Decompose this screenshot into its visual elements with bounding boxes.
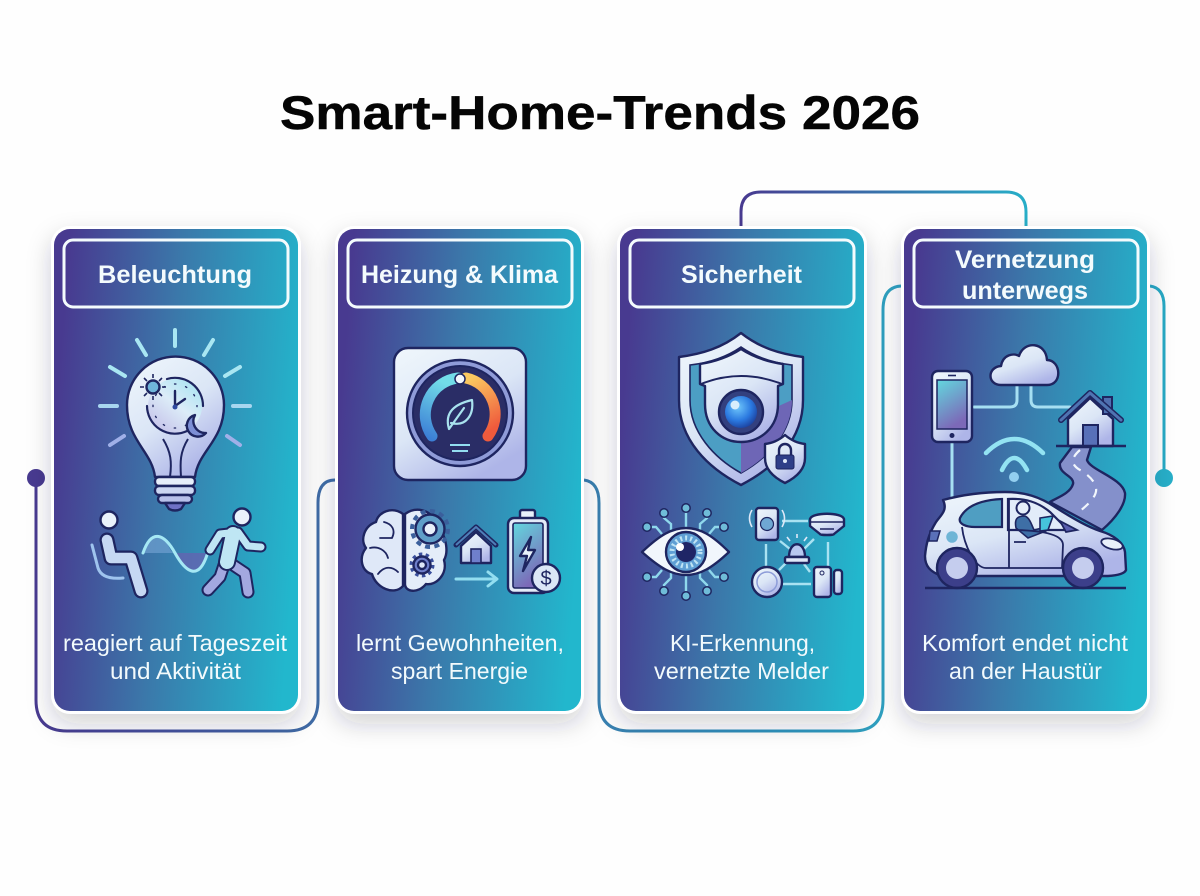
text: Vernetzung description — [922, 630, 1129, 684]
heading: Beleuchtung — [64, 240, 288, 307]
heading: Heizung & Klima: Heizung & Klima — [361, 261, 559, 289]
heading: Vernetzung unterwegs: Vernetzung — [955, 246, 1095, 274]
icon: brain, house and battery — [362, 510, 560, 593]
panel: Vernetzung unterwegs — [901, 226, 1150, 714]
text: Sicherheit description: vernetzte Melder — [654, 658, 829, 684]
panel: Beleuchtung — [51, 226, 301, 714]
text: Sicherheit description — [654, 630, 829, 684]
connector: Sicherheit to Vernetzung top — [741, 192, 1026, 226]
icon: shield with camera and lock — [679, 333, 805, 485]
panel: Heizung & Klima — [335, 226, 584, 714]
icon: AI eye — [642, 504, 729, 600]
icon: brain, house and battery: $ — [540, 568, 552, 590]
text: Beleuchtung description — [63, 630, 288, 684]
title: Smart-Home-Trends 2026 — [280, 86, 920, 139]
text: Heizung description: lernt Gewohnheiten, — [356, 630, 564, 656]
heading: Beleuchtung: Beleuchtung — [98, 261, 252, 289]
heading: Vernetzung unterwegs — [914, 240, 1138, 307]
text: Heizung description: spart Energie — [391, 658, 528, 684]
text: Vernetzung description: an der Haustür — [949, 658, 1102, 684]
heading: Sicherheit — [630, 240, 854, 307]
icon: seated and walking person with wave — [92, 508, 261, 592]
text: Vernetzung description: Komfort endet nicht — [922, 630, 1129, 656]
heading: Heizung & Klima — [348, 240, 572, 307]
text: Heizung description — [356, 630, 564, 684]
text: Beleuchtung description: reagiert auf Tageszeit — [63, 630, 288, 656]
text: Beleuchtung description: und Aktivität — [110, 658, 242, 684]
connector: from Beleuchtung to Heizung — [27, 469, 335, 731]
icon: phone, cloud, house, car — [925, 345, 1126, 588]
heading: Sicherheit: Sicherheit — [681, 261, 803, 289]
icon: thermostat — [394, 348, 526, 480]
connector: from Heizung to Vernetzung — [584, 286, 901, 731]
text: Sicherheit description: KI-Erkennung, — [670, 630, 815, 656]
icon: connected sensors — [750, 508, 844, 597]
icon: light bulb with clock — [100, 330, 250, 510]
connector: right end with dot — [1150, 286, 1173, 487]
heading: Vernetzung unterwegs: unterwegs — [962, 277, 1088, 305]
panel: Sicherheit — [617, 226, 867, 714]
